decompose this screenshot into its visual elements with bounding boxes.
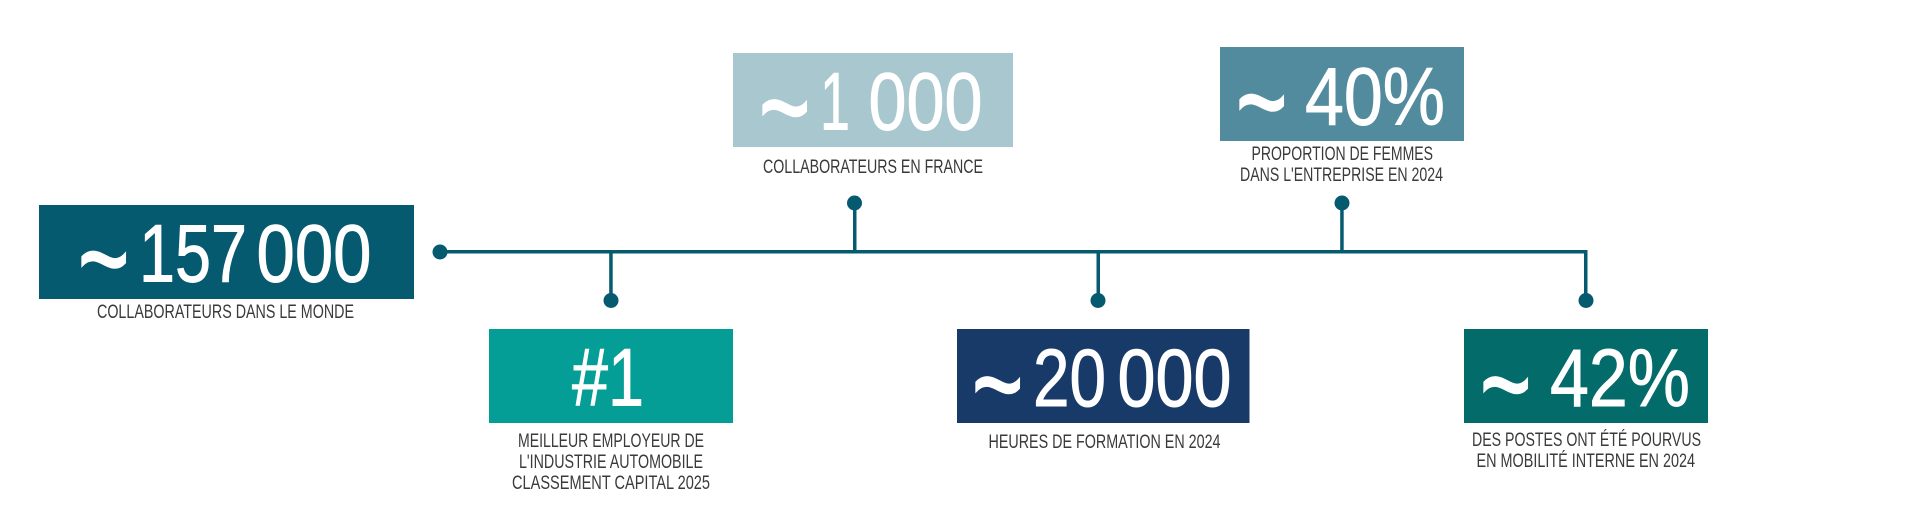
panel: 157 000 collaborateurs: ~	[78, 183, 129, 332]
panel: 42% de postes en mobilité	[1464, 309, 1708, 472]
panel: 20 000 heures de formation: ~	[972, 309, 1023, 457]
panel: 20 000 heures de formation	[957, 309, 1250, 457]
panel: 42% de postes en mobilité: ~	[1480, 309, 1531, 457]
panel: 40% de femmes	[1220, 26, 1464, 186]
panel: 157 000 collaborateurs: 000	[256, 208, 372, 300]
panel: meilleur employeur: #1	[572, 332, 644, 424]
panel: 40% de femmes: ~	[1236, 26, 1287, 175]
panel: 1 000 collaborateurs en France: ~	[759, 32, 810, 180]
panel: 40% de femmes: PROPORTION DE FEMMES	[1252, 143, 1433, 165]
panel: meilleur employeur	[489, 329, 733, 494]
panel: 20 000 heures de formation: HEURES DE FORMATION EN 2024	[988, 431, 1221, 453]
panel: 157 000 collaborateurs: COLLABORATEURS DANS LE MONDE	[97, 301, 354, 323]
panel: 42% de postes en mobilité: 42%	[1550, 333, 1690, 424]
panel: 42% de postes en mobilité: DES POSTES ONT ÉTÉ POURVUS	[1472, 428, 1701, 451]
panel: 1 000 collaborateurs en France: 000	[868, 56, 982, 148]
panel: 20 000 heures de formation: 000	[1118, 333, 1232, 424]
panel: 157 000 collaborateurs: 157	[139, 208, 247, 300]
panel: meilleur employeur: MEILLEUR EMPLOYEUR DE	[518, 430, 704, 452]
panel: 1 000 collaborateurs en France	[733, 32, 1013, 180]
timeline connector	[432, 196, 1594, 308]
panel: 40% de femmes: DANS L'ENTREPRISE EN 2024	[1240, 164, 1443, 186]
panel: 40% de femmes: 40%	[1305, 52, 1445, 142]
panel: 1 000 collaborateurs en France: 1	[820, 56, 850, 148]
panel: 42% de postes en mobilité: EN MOBILITÉ INTERNE EN 2024	[1476, 449, 1695, 472]
panel: 20 000 heures de formation: 20	[1033, 333, 1106, 424]
panel: 157 000 collaborateurs	[39, 183, 414, 332]
panel: meilleur employeur: L'INDUSTRIE AUTOMOBILE	[519, 451, 703, 473]
panel: 1 000 collaborateurs en France: COLLABORATEURS EN FRANCE	[763, 156, 983, 178]
panel: meilleur employeur: CLASSEMENT CAPITAL 2025	[512, 472, 710, 494]
